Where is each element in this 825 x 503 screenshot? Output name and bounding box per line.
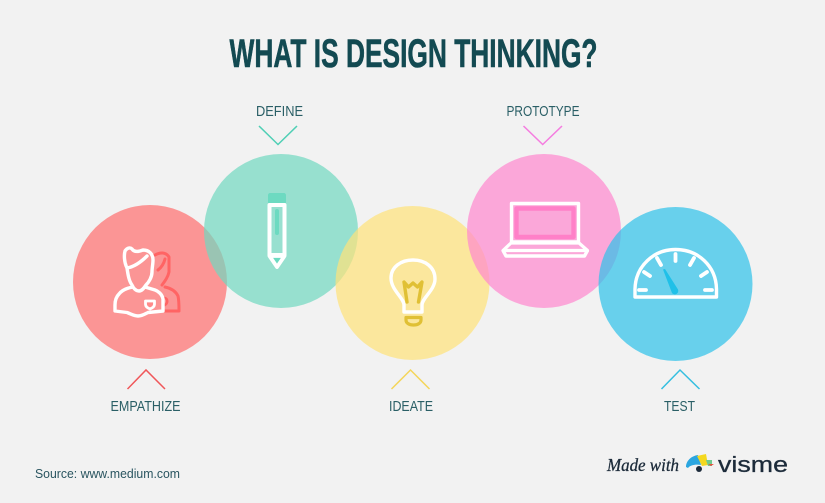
icon: people	[115, 248, 179, 316]
arrow: prototype	[524, 126, 562, 144]
label: ideate: IDEATE	[389, 398, 433, 415]
icon: laptop	[503, 204, 588, 256]
title: WHAT IS DESIGN THINKING?	[230, 32, 598, 76]
label: define	[256, 103, 303, 144]
made with visme logo: visme	[718, 452, 788, 477]
arrow: define	[259, 126, 297, 144]
label: define: DEFINE	[256, 103, 303, 120]
label: test: TEST	[664, 398, 695, 415]
label: empathize: EMPATHIZE	[110, 398, 180, 415]
circle: define	[204, 154, 358, 308]
circle: prototype	[467, 154, 621, 308]
circle: ideate	[336, 206, 490, 360]
circle: test	[598, 207, 752, 361]
source note: Source: www.medium.com	[35, 467, 180, 481]
circle: empathize	[73, 205, 227, 359]
arrow: empathize	[128, 370, 165, 389]
icon: pencil	[268, 193, 286, 267]
icon: speedometer	[635, 250, 716, 297]
arrow: test	[662, 370, 700, 389]
arrow: ideate	[392, 370, 430, 389]
icon: visme logo mark	[686, 454, 714, 472]
label: empathize	[110, 370, 180, 415]
made with visme logo	[606, 452, 788, 477]
icon: light bulb	[391, 260, 435, 325]
label: prototype: PROTOTYPE	[506, 103, 580, 120]
label: ideate	[389, 370, 433, 415]
label: prototype	[506, 103, 580, 144]
made with visme logo: Made with	[606, 455, 679, 475]
label: test	[662, 370, 700, 415]
